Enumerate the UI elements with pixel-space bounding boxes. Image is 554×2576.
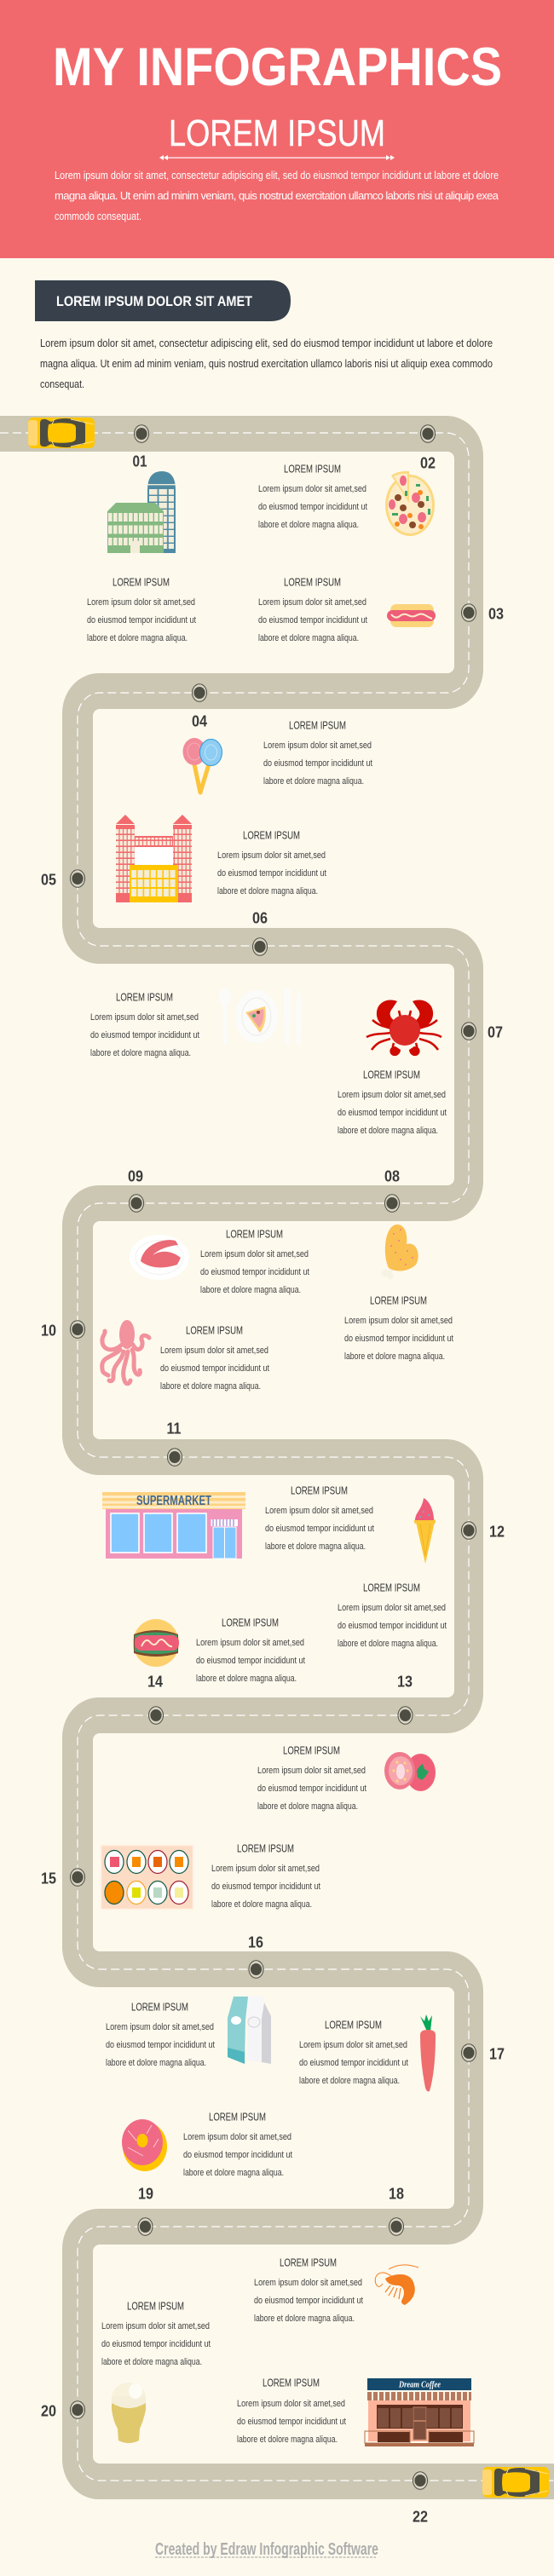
text block 22: Lorem ipsum dolor sit amet,sed: [237, 2399, 345, 2409]
text block 17: LOREM IPSUM: [325, 2020, 382, 2031]
icon: crab: [366, 1000, 441, 1056]
text block 10: LOREM IPSUM: [186, 1324, 243, 1336]
text block 03: LOREM IPSUM: [284, 576, 341, 588]
text block 08: Lorem ipsum dolor sit amet,sed: [344, 1316, 453, 1326]
icon: shrimp: [375, 2265, 418, 2305]
step numbers: 10: [41, 1323, 56, 1340]
icon: milk cartons: [228, 1997, 271, 2064]
text block 11: Lorem ipsum dolor sit amet,sed: [265, 1506, 373, 1516]
text block 12: [338, 1582, 447, 1649]
text block 17: [299, 2020, 408, 2086]
step numbers: 13: [397, 1674, 413, 1691]
text block 09: do eiusmod tempor incididunt ut: [200, 1267, 309, 1277]
text block 03: labore et dolore magna aliqua.: [258, 633, 359, 643]
icon: donut: [122, 2119, 167, 2171]
icon: dream coffee shop: Dream Coffee: [398, 2379, 441, 2389]
arrow divider: [159, 155, 395, 160]
text block 22: [237, 2377, 346, 2445]
step numbers: [41, 453, 505, 2526]
text block 04: labore et dolore magna aliqua.: [263, 776, 364, 787]
text block 18: do eiusmod tempor incididunt ut: [183, 2150, 292, 2160]
text block 08: [344, 1295, 453, 1362]
text block 12: labore et dolore magna aliqua.: [338, 1639, 438, 1649]
panel: header: [0, 0, 554, 258]
icon: supermarket: [102, 1492, 245, 1559]
text block 06: LOREM IPSUM: [116, 992, 173, 1004]
step numbers: 07: [488, 1024, 503, 1041]
text block 01: labore et dolore magna aliqua.: [87, 633, 188, 643]
text block 03: Lorem ipsum dolor sit amet,sed: [258, 597, 366, 608]
text block 15: Lorem ipsum dolor sit amet,sed: [211, 1864, 320, 1874]
text block 08: LOREM IPSUM: [370, 1295, 427, 1307]
text block 20: do eiusmod tempor incididunt ut: [101, 2339, 211, 2349]
step numbers: 19: [138, 2185, 153, 2202]
text block 19: labore et dolore magna aliqua.: [254, 2314, 355, 2324]
step numbers: 16: [248, 1934, 263, 1951]
heading bar: [35, 280, 291, 321]
text block 14: [257, 1745, 366, 1812]
header paragraph: [55, 169, 499, 222]
text block 10: Lorem ipsum dolor sit amet,sed: [160, 1346, 268, 1356]
text block 08: labore et dolore magna aliqua.: [344, 1351, 445, 1362]
text block 10: do eiusmod tempor incididunt ut: [160, 1363, 269, 1374]
text block 15: labore et dolore magna aliqua.: [211, 1899, 312, 1910]
text block 01: [87, 576, 196, 643]
step numbers: 12: [489, 1524, 505, 1541]
text block 06: Lorem ipsum dolor sit amet,sed: [90, 1012, 199, 1023]
text block 10: labore et dolore magna aliqua.: [160, 1381, 261, 1392]
text block 16: LOREM IPSUM: [131, 2001, 188, 2013]
icon: plate and cutlery: [219, 988, 302, 1045]
text block 05: labore et dolore magna aliqua.: [217, 886, 318, 896]
text block 16: [106, 2001, 215, 2068]
icon: office buildings: [107, 471, 176, 553]
step numbers: 17: [489, 2045, 505, 2062]
text block 11: [265, 1484, 374, 1552]
text block 10: [160, 1324, 269, 1392]
text block 19: [254, 2256, 363, 2324]
step numbers: 20: [41, 2403, 56, 2420]
text block 07: LOREM IPSUM: [363, 1069, 420, 1081]
text block 07: do eiusmod tempor incididunt ut: [338, 1108, 447, 1118]
icon: start car: [28, 418, 95, 448]
header paragraph: commodo consequat.: [55, 210, 141, 222]
text block 14: do eiusmod tempor incididunt ut: [257, 1784, 366, 1794]
text block 07: [338, 1069, 447, 1136]
text block 09: LOREM IPSUM: [226, 1229, 283, 1241]
text block 11: labore et dolore magna aliqua.: [265, 1542, 366, 1552]
text block 11: LOREM IPSUM: [291, 1484, 348, 1496]
icon: sushi tray: [101, 1846, 193, 1909]
step numbers: 15: [41, 1870, 56, 1887]
text block 17: do eiusmod tempor incididunt ut: [299, 2058, 408, 2068]
text block 14: Lorem ipsum dolor sit amet,sed: [257, 1766, 366, 1776]
text block 13: [196, 1617, 305, 1684]
text block 13: labore et dolore magna aliqua.: [196, 1674, 297, 1684]
text block 20: LOREM IPSUM: [127, 2301, 184, 2313]
text block 04: do eiusmod tempor incididunt ut: [263, 758, 372, 769]
step numbers: 14: [147, 1674, 163, 1691]
text block 12: do eiusmod tempor incididunt ut: [338, 1621, 447, 1631]
text block 14: labore et dolore magna aliqua.: [257, 1801, 358, 1812]
header paragraph: magna aliqua. Ut enim ad minim veniam, quis nostrud exercitation ullamco laboris nisi ut aliquip exea: [55, 189, 499, 202]
text block 05: do eiusmod tempor incididunt ut: [217, 868, 326, 879]
text block 18: labore et dolore magna aliqua.: [183, 2168, 284, 2178]
text block 22: do eiusmod tempor incididunt ut: [237, 2417, 346, 2427]
step numbers: 04: [192, 712, 207, 729]
step numbers: 22: [413, 2509, 428, 2526]
text block 05: Lorem ipsum dolor sit amet,sed: [217, 850, 326, 861]
icon: lollipops: [182, 738, 222, 792]
step numbers: 02: [420, 455, 436, 472]
subtitle: LOREM IPSUM: [169, 112, 385, 154]
text block 19: do eiusmod tempor incididunt ut: [254, 2296, 363, 2306]
text block 16: Lorem ipsum dolor sit amet,sed: [106, 2022, 214, 2032]
text block 02: do eiusmod tempor incididunt ut: [258, 502, 367, 512]
step numbers: 01: [133, 453, 147, 470]
text block 04: LOREM IPSUM: [289, 719, 346, 731]
text block 15: [211, 1842, 320, 1910]
text block 13: LOREM IPSUM: [222, 1617, 279, 1629]
text block 15: LOREM IPSUM: [237, 1842, 294, 1854]
step numbers: 03: [488, 605, 504, 622]
text block 02: LOREM IPSUM: [284, 464, 341, 475]
text block 09: [200, 1229, 309, 1295]
text block 20: [101, 2301, 211, 2367]
text block 18: LOREM IPSUM: [209, 2112, 266, 2124]
icon: castle: [116, 815, 192, 902]
footer credit: Created by Edraw Infographic Software: [155, 2540, 378, 2559]
heading bar: LOREM IPSUM DOLOR SIT AMET: [56, 294, 252, 309]
icon: beer glass: [112, 2383, 146, 2443]
text block 09: labore et dolore magna aliqua.: [200, 1285, 301, 1295]
text block 03: [258, 576, 367, 643]
icon: ice cream cone: [414, 1498, 436, 1564]
text block 12: Lorem ipsum dolor sit amet,sed: [338, 1603, 446, 1613]
icon: sashimi plate: [130, 1235, 189, 1280]
road markers: [70, 425, 476, 2489]
text block 17: labore et dolore magna aliqua.: [299, 2076, 400, 2086]
text block 17: Lorem ipsum dolor sit amet,sed: [299, 2040, 407, 2050]
text block 22: labore et dolore magna aliqua.: [237, 2435, 338, 2445]
text block 01: do eiusmod tempor incididunt ut: [87, 615, 196, 625]
icon: tomatoes: [384, 1752, 436, 1791]
text block 09: Lorem ipsum dolor sit amet,sed: [200, 1249, 309, 1259]
text block 04: Lorem ipsum dolor sit amet,sed: [263, 741, 372, 751]
text block 07: labore et dolore magna aliqua.: [338, 1126, 438, 1136]
text block 22: LOREM IPSUM: [263, 2377, 320, 2389]
text block 13: Lorem ipsum dolor sit amet,sed: [196, 1638, 304, 1648]
text block 01: Lorem ipsum dolor sit amet,sed: [87, 597, 195, 608]
text block 06: labore et dolore magna aliqua.: [90, 1048, 191, 1058]
text block 16: do eiusmod tempor incididunt ut: [106, 2040, 215, 2050]
text block 07: Lorem ipsum dolor sit amet,sed: [338, 1090, 446, 1100]
step numbers: 08: [384, 1167, 400, 1184]
icon: hot dog: [387, 604, 436, 627]
text block 15: do eiusmod tempor incididunt ut: [211, 1882, 320, 1892]
icon: carrot: [420, 2014, 436, 2091]
icon: octopus: [102, 1320, 149, 1384]
text block 05: [217, 830, 326, 896]
step numbers: 09: [128, 1167, 143, 1184]
text block 08: do eiusmod tempor incididunt ut: [344, 1334, 453, 1344]
text block 18: [183, 2112, 292, 2178]
text block 18: Lorem ipsum dolor sit amet,sed: [183, 2132, 291, 2142]
text block 20: labore et dolore magna aliqua.: [101, 2357, 202, 2367]
text block 02: Lorem ipsum dolor sit amet,sed: [258, 484, 366, 494]
step numbers: 11: [167, 1420, 181, 1437]
intro paragraph: [40, 337, 493, 390]
text block 12: LOREM IPSUM: [363, 1582, 420, 1593]
text block 03: do eiusmod tempor incididunt ut: [258, 615, 367, 625]
step numbers: 05: [41, 871, 56, 888]
text block 16: labore et dolore magna aliqua.: [106, 2058, 206, 2068]
icon: pizza: [385, 471, 435, 536]
text block 11: do eiusmod tempor incididunt ut: [265, 1524, 374, 1534]
text block 19: Lorem ipsum dolor sit amet,sed: [254, 2278, 362, 2288]
text block 06: [90, 992, 199, 1058]
text block 06: do eiusmod tempor incididunt ut: [90, 1030, 199, 1040]
icon: end car: [482, 2467, 549, 2498]
text block 02: labore et dolore magna aliqua.: [258, 520, 359, 530]
title: MY INFOGRAPHICS: [53, 37, 502, 97]
text block 20: Lorem ipsum dolor sit amet,sed: [101, 2321, 210, 2331]
icon: chicken drumstick: [382, 1225, 418, 1280]
intro paragraph: consequat.: [40, 377, 84, 390]
text block 01: LOREM IPSUM: [113, 576, 170, 588]
step numbers: 18: [389, 2185, 404, 2202]
icon: supermarket: SUPERMARKET: [136, 1494, 211, 1508]
icon: burger: [133, 1619, 179, 1667]
text block 13: do eiusmod tempor incididunt ut: [196, 1656, 305, 1666]
step numbers: 06: [252, 910, 268, 927]
icon: dream coffee shop: [365, 2378, 474, 2446]
text block 04: [263, 719, 372, 787]
text block 14: LOREM IPSUM: [283, 1745, 340, 1757]
text block 02: [258, 464, 367, 530]
text block 05: LOREM IPSUM: [243, 830, 300, 842]
text block 19: LOREM IPSUM: [280, 2256, 337, 2268]
